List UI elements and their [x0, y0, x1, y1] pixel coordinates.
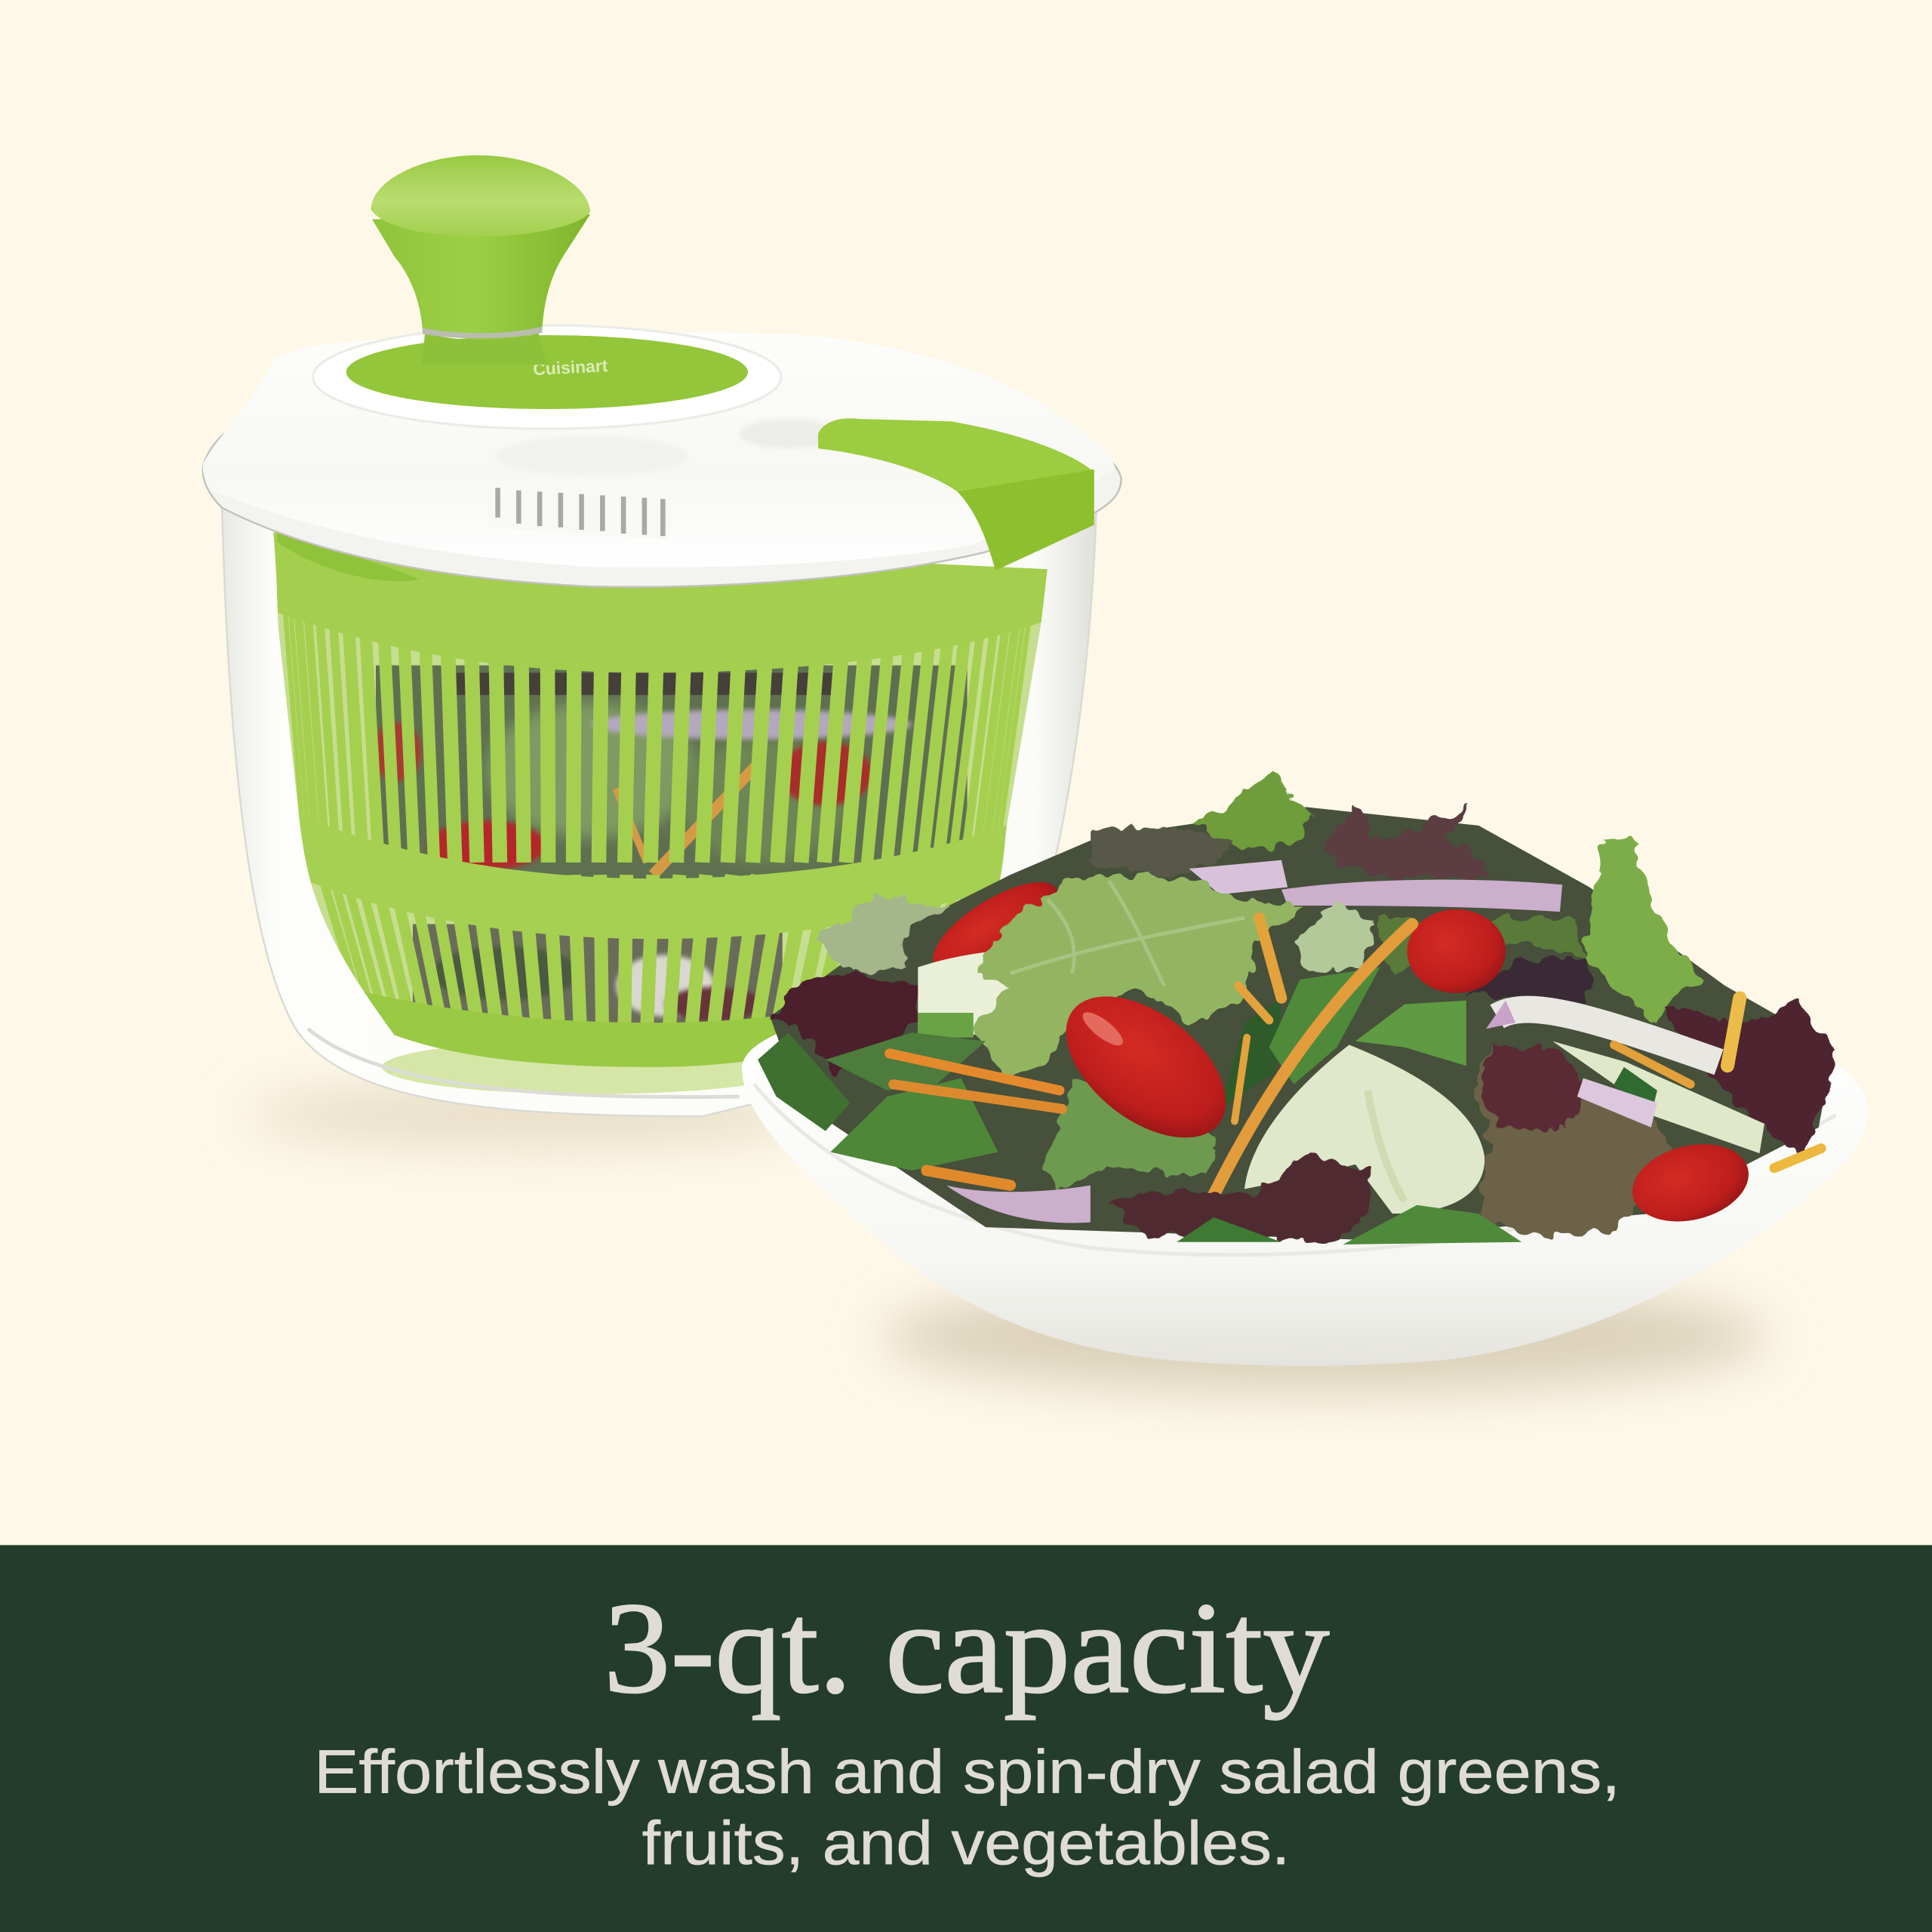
onion piece right	[1577, 1078, 1657, 1128]
bottom banner	[0, 1545, 1932, 1932]
bowl base arc	[308, 1029, 740, 1097]
white lid top	[203, 332, 1115, 568]
description line 1: Effortlessly wash and spin-dry salad greens,	[314, 1738, 1620, 1807]
lid side recess	[740, 419, 838, 448]
big cucumber slice	[1244, 1044, 1484, 1214]
tomato bottom right	[1624, 1133, 1757, 1233]
pale left leaf	[814, 894, 946, 974]
white dish	[742, 1029, 1868, 1366]
lid disc ring	[313, 325, 781, 429]
basket base colour	[265, 524, 1054, 1072]
lid recess shading	[495, 436, 688, 475]
green basket	[265, 524, 1054, 1084]
dark purple leaf mid right	[1466, 955, 1589, 1004]
pale leaf centre right	[1294, 900, 1374, 974]
left purple leaf	[770, 974, 918, 1072]
red-green frilly leaf	[1472, 1041, 1675, 1236]
bottom red onion	[946, 1186, 1091, 1223]
salad spinner	[203, 155, 1121, 1116]
dish rim highlight	[754, 1084, 1836, 1255]
background	[0, 0, 1932, 1545]
knob neck base	[421, 333, 547, 365]
back dark leaf	[1087, 828, 1232, 877]
white onion ribbon	[1486, 1001, 1719, 1062]
right-mid green	[1374, 918, 1583, 974]
pale slot backdrop	[265, 604, 1054, 1029]
salad bowl	[742, 770, 1868, 1366]
main grape tomato	[1041, 968, 1251, 1166]
knob stem	[372, 214, 590, 336]
back purple leaf	[1318, 801, 1491, 877]
clear outer bowl	[222, 499, 1097, 1116]
knob dome	[371, 155, 590, 236]
lower-left green	[1177, 1217, 1281, 1242]
salad visible through the slots	[372, 666, 968, 1029]
red onion strips	[1189, 860, 1562, 912]
carrot strips	[890, 918, 1281, 1186]
central green leaves	[1269, 968, 1466, 1084]
long carrot strip	[1214, 924, 1412, 1195]
spinner lid	[203, 155, 1121, 587]
tomato top right	[1407, 909, 1506, 993]
salad mound base	[770, 807, 1833, 1239]
right cucumber	[1552, 1041, 1764, 1153]
middle band of basket	[299, 815, 1007, 939]
left cucumber	[918, 948, 1084, 1038]
upper basket ribs	[285, 604, 1032, 863]
top band of basket	[265, 524, 1054, 672]
description line 2: fruits, and vegetables.	[642, 1809, 1290, 1878]
heading: 3-qt. capacity	[604, 1577, 1330, 1721]
green lid clip	[818, 418, 1094, 571]
darker shade on top band	[277, 532, 419, 581]
lettuce veins	[1011, 881, 1244, 986]
clip top face	[818, 418, 1094, 491]
clip front face	[958, 469, 1094, 571]
green lid disc	[346, 335, 748, 409]
knob	[371, 155, 590, 365]
spinach leaves	[758, 998, 1281, 1189]
green reflection in bowl base	[382, 1040, 801, 1094]
carrot strips right	[1614, 998, 1821, 1168]
salad bowl shadow	[881, 1280, 1768, 1394]
tomato back left	[921, 866, 1071, 987]
lower basket ribs	[321, 875, 984, 1029]
right purple frilly leaf	[1663, 995, 1836, 1152]
bottom purple leaf	[1109, 1152, 1371, 1242]
banner background	[0, 1545, 1932, 1932]
back green leaf	[1192, 770, 1312, 851]
bottom green leaves	[1343, 1205, 1521, 1244]
bottom of basket	[364, 992, 776, 1067]
right lettuce leaf	[1583, 838, 1703, 1025]
spinner shadow	[247, 1085, 814, 1145]
brand wordmark: Cuisinart	[533, 355, 608, 379]
large central lettuce	[974, 877, 1306, 1078]
lid vents	[488, 483, 672, 540]
clear lid rim	[203, 401, 1121, 587]
knob stem collar	[423, 327, 542, 338]
